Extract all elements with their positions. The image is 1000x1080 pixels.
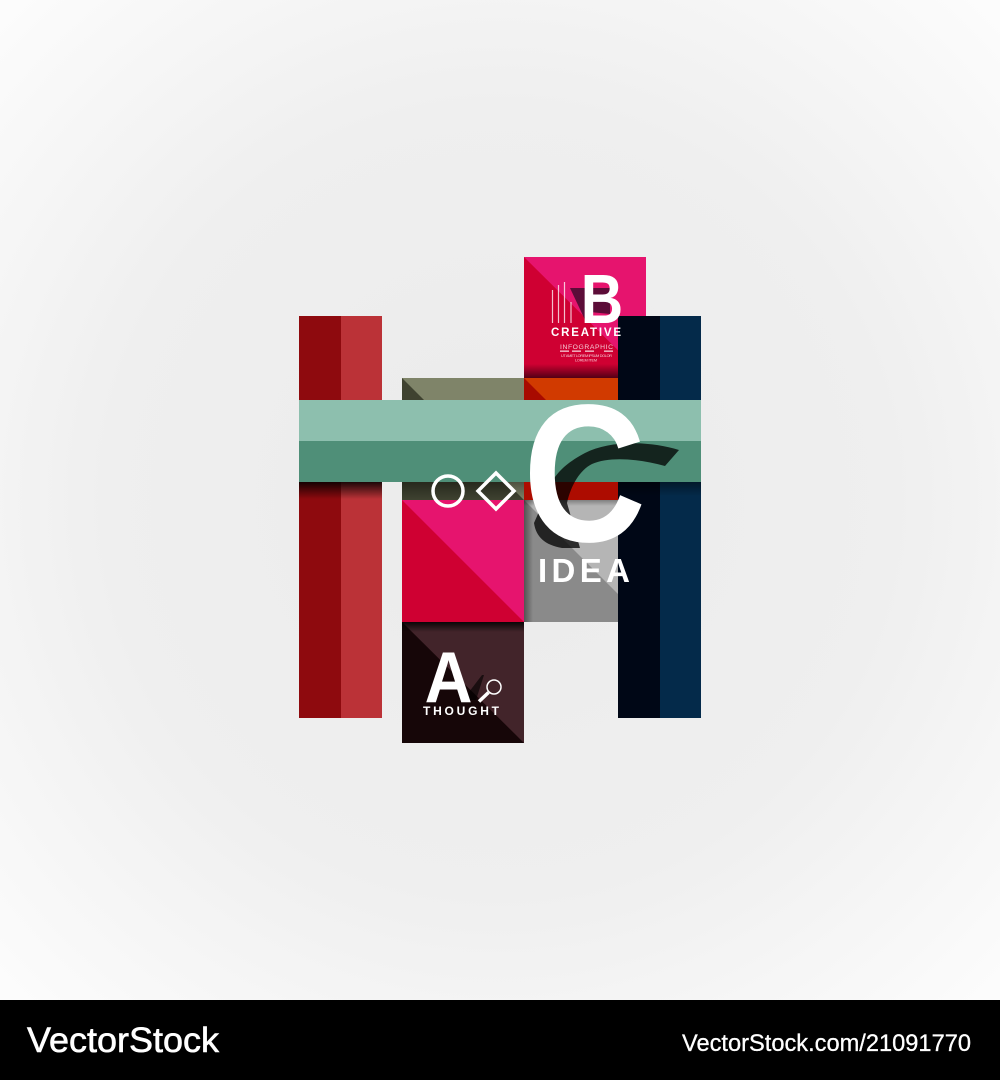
panel: B creative square [524,257,646,378]
label: thought: THOUGHT [423,704,500,718]
icon: magnifier [479,680,501,702]
panel: olive square [402,378,524,500]
label: idea: IDEA [538,552,630,589]
icon: circle outline [433,476,463,506]
text block: infographic caption: UT AMET LOREM IPSUM DOLOR [561,354,612,358]
text block: infographic caption [560,344,613,362]
brand name: VectorStock [27,1021,220,1060]
icon: vertical lines [552,282,571,323]
letter B shadow [570,288,610,322]
panel: navy vertical bar [618,316,701,718]
panel: pink square [402,500,524,622]
label: creative: CREATIVE [551,327,621,339]
footer band [0,1000,1000,1080]
text block: infographic caption: INFOGRAPHIC [560,344,613,351]
letter A: A [425,636,472,718]
image id: VectorStock.com/21091770 [682,1030,971,1057]
letter B: B [581,259,623,338]
text block: infographic caption: LOREM ITEM [575,358,597,362]
icon: diamond outline [478,473,514,509]
letter C shadow [534,443,679,548]
panel: red vertical bar [299,316,382,718]
panel: A thought square [402,622,524,743]
icon: letter A shadow [466,675,484,700]
panel: grey square [524,500,618,622]
letter C: C [523,364,646,583]
panel: green horizontal bar [299,400,701,482]
panel: orange square [524,378,618,500]
